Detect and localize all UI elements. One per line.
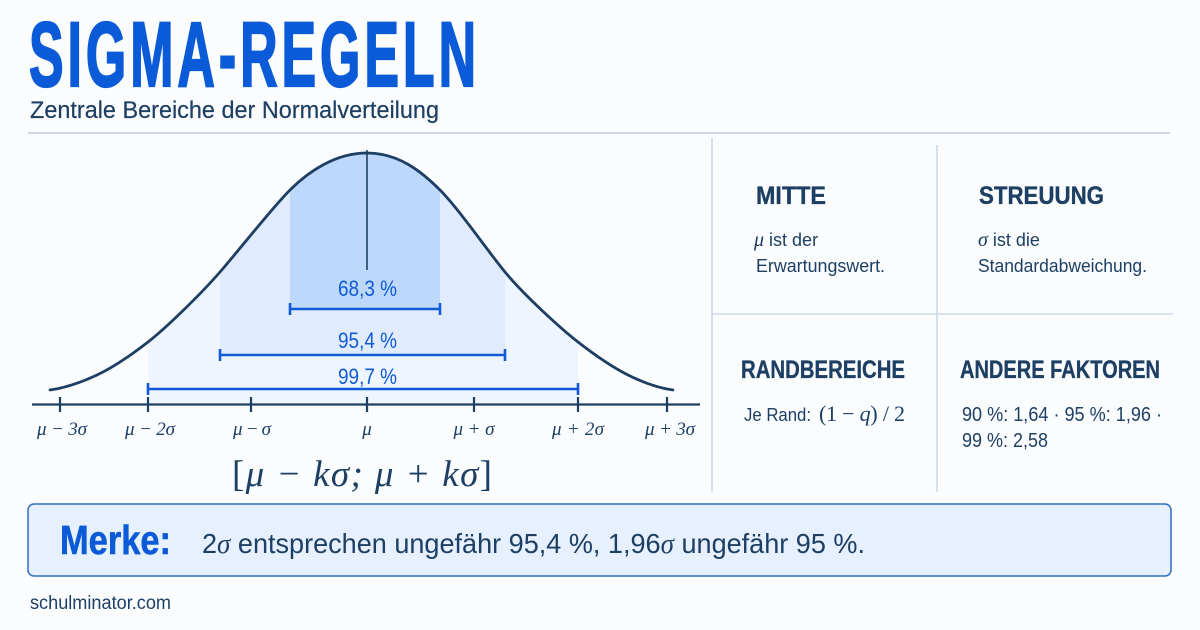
panel: Andere Faktoren: 90 %: 1,64 · 95 %: 1,96 · (962, 404, 1162, 426)
panel: Streuung: STREUUNG (979, 182, 1104, 210)
grid lines (712, 138, 1173, 492)
axis (32, 397, 700, 412)
panel: Randbereiche (741, 356, 905, 426)
interval formula: [μ − kσ; μ + kσ] (232, 454, 492, 495)
mean line (366, 150, 368, 270)
panel: Streuung (978, 182, 1147, 276)
subtitle: Zentrale Bereiche der Normalverteilung (30, 97, 439, 124)
panel: Mitte: μ ist der (753, 229, 818, 251)
axis labels: μ − 2σ (124, 419, 176, 440)
panel: Mitte: Erwartungswert. (756, 256, 885, 276)
panel: Streuung: σ ist die (978, 229, 1040, 251)
axis labels: μ + σ (452, 419, 495, 440)
panel: Mitte (753, 182, 885, 276)
axis labels: μ (361, 419, 372, 440)
axis labels: μ − σ (232, 419, 272, 440)
panel: Andere Faktoren (960, 356, 1162, 452)
range 99,7 %: 99,7 % (338, 364, 397, 389)
callout: Merke: 2σ entsprechen ungefähr 95,4 %, 1,96σ ungefähr 95 %. (202, 528, 865, 560)
panel: Streuung: Standardabweichung. (978, 256, 1147, 276)
footer source: schulminator.com (30, 593, 171, 614)
panel: Randbereiche: RANDBEREICHE (741, 356, 905, 384)
range 95,4 %: 95,4 % (338, 328, 397, 353)
panel: Randbereiche: Je Rand: (744, 405, 811, 425)
range 68,3 % (290, 276, 440, 315)
range 99,7 % (148, 364, 578, 395)
panel: Andere Faktoren: 99 %: 2,58 (962, 430, 1048, 452)
callout: Merke (28, 504, 1171, 576)
axis labels: μ − 3σ (36, 419, 88, 440)
callout: Merke: Merke: (60, 517, 171, 563)
range 68,3 %: 68,3 % (338, 276, 397, 301)
axis labels: μ + 3σ (644, 419, 696, 440)
shaded regions (148, 140, 578, 404)
axis labels: μ + 2σ (551, 419, 605, 440)
range 95,4 % (220, 328, 505, 361)
axis labels (36, 419, 696, 440)
chart: normal distribution (32, 140, 700, 495)
panel: Mitte: MITTE (756, 182, 826, 210)
title: SIGMA-REGELN (29, 4, 480, 106)
bell curve (50, 153, 673, 390)
panel: Randbereiche: (1 − q) / 2 (819, 401, 905, 426)
